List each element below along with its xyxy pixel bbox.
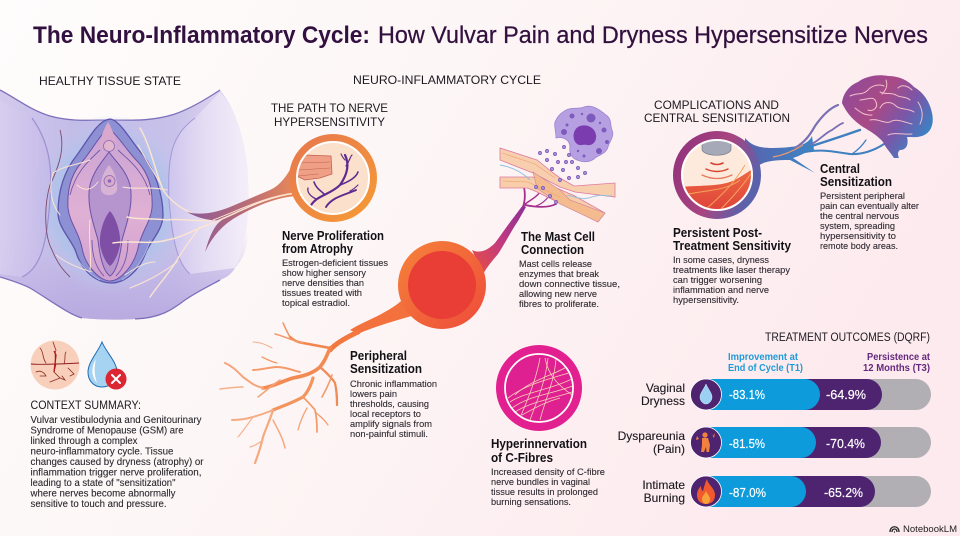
text block: Estrogen-deficient tissues bbox=[282, 258, 388, 269]
text block: Mast cells release bbox=[519, 259, 592, 270]
heading bbox=[491, 437, 587, 465]
text block: inflammation and nerve bbox=[673, 285, 769, 296]
logo: notebooklm: NotebookLM bbox=[903, 524, 957, 534]
icon: inflammation node bbox=[350, 241, 486, 334]
text block: tissues treated with bbox=[282, 288, 362, 299]
text block: topical estradiol. bbox=[282, 298, 350, 309]
panel: context summary bbox=[30, 340, 204, 510]
text block: fibres to proliferate. bbox=[519, 299, 599, 310]
row: dyspareunia: (Pain) bbox=[653, 442, 685, 456]
title: How Vulvar Pain and Dryness Hypersensitize Nerves bbox=[378, 22, 928, 49]
illustration: healthy tissue anatomy bbox=[0, 90, 248, 320]
icon: mast cell bbox=[535, 106, 613, 203]
heading: the path to nerve hypersensitivity bbox=[271, 101, 388, 129]
legend: persistence: Persistence at bbox=[867, 352, 931, 363]
panel: peripheral sensitization bbox=[350, 349, 437, 440]
icon: laser treatment on tissue bbox=[673, 131, 761, 219]
text block bbox=[491, 467, 605, 508]
text block: tissue results in prolonged bbox=[491, 487, 598, 498]
heading: The Mast Cell bbox=[521, 230, 595, 244]
heading: Sensitization bbox=[350, 362, 422, 376]
row: intimate burning: -87.0% bbox=[729, 485, 766, 500]
text block: Chronic inflammation bbox=[350, 379, 437, 390]
legend: improvement: Improvement at bbox=[728, 352, 799, 363]
text block: linked through a complex bbox=[30, 436, 138, 447]
text block: hypersensitivity to bbox=[820, 231, 896, 242]
panel: nerve proliferation from atrophy bbox=[282, 134, 388, 309]
icon: water drop with cross bbox=[88, 342, 126, 390]
icon: c-fibre bundle bbox=[496, 345, 582, 431]
row: intimate burning: Burning bbox=[644, 491, 685, 505]
heading: the path to nerve hypersensitivity: HYPERSENSITIVITY bbox=[274, 115, 385, 129]
heading bbox=[673, 226, 791, 253]
title: The Neuro-Inflammatory Cycle: bbox=[33, 22, 370, 49]
panel: hyperinnervation of c-fibres bbox=[491, 345, 605, 508]
text block: leading to a state of "sensitization" bbox=[30, 478, 176, 489]
heading: complications and central sensitization: CENTRAL SENSITIZATION bbox=[644, 111, 790, 125]
text block: non-painful stimuli. bbox=[350, 429, 428, 440]
nerve: inflammation node to mast cell tissue bbox=[472, 183, 556, 274]
text block: pain can eventually alter bbox=[820, 201, 919, 212]
row: intimate burning: -65.2% bbox=[824, 485, 863, 500]
text block: inflammation trigger nerve proliferation, bbox=[30, 468, 202, 478]
text block: down connective tissue, bbox=[519, 279, 620, 290]
text block: Syndrome of Menopause (GSM) are bbox=[30, 426, 184, 436]
heading: Sensitization bbox=[820, 175, 892, 189]
row: dyspareunia: -81.5% bbox=[729, 436, 765, 451]
heading: neuro-inflammatory cycle: NEURO-INFLAMMATORY CYCLE bbox=[353, 73, 541, 87]
icon: cracked dry skin bbox=[30, 340, 80, 390]
legend: persistence: 12 Months (T3) bbox=[863, 363, 930, 374]
text block: neuro-inflammatory cycle. Tissue bbox=[30, 446, 174, 458]
text block: Persistent peripheral bbox=[820, 191, 905, 202]
text block: Increased density of C-fibre bbox=[491, 467, 605, 478]
row: intimate burning: Intimate bbox=[642, 478, 685, 492]
legend: persistence bbox=[863, 352, 931, 374]
text block: enzymes that break bbox=[519, 269, 599, 280]
text block bbox=[673, 255, 790, 306]
text block: amplify signals from bbox=[350, 419, 432, 430]
text block: In some cases, dryness bbox=[673, 255, 769, 266]
title bbox=[33, 22, 928, 49]
text block: allowing new nerve bbox=[519, 289, 597, 300]
panel: central sensitization bbox=[820, 162, 919, 252]
text block: Vulvar vestibulodynia and Genitourinary bbox=[30, 415, 202, 426]
panel: the mast cell connection bbox=[500, 106, 620, 310]
heading: Persistent Post- bbox=[673, 226, 762, 240]
heading: complications and central sensitization: COMPLICATIONS AND bbox=[654, 98, 779, 112]
text block: can trigger worsening bbox=[673, 275, 762, 286]
heading bbox=[282, 229, 384, 256]
panel: persistent post-treatment sensitivity bbox=[673, 131, 791, 306]
heading bbox=[350, 349, 422, 376]
text block bbox=[820, 191, 919, 252]
row: vaginal dryness: Vaginal bbox=[646, 381, 685, 395]
row: vaginal dryness: Dryness bbox=[641, 394, 685, 408]
text block: system, spreading bbox=[820, 221, 895, 232]
heading: healthy tissue state: HEALTHY TISSUE STATE bbox=[39, 74, 181, 88]
text block: local receptors to bbox=[350, 409, 421, 420]
nerve trunk: laser circle to brain bbox=[745, 105, 884, 198]
legend: improvement: End of Cycle (T1) bbox=[728, 363, 803, 374]
text block: treatments like laser therapy bbox=[673, 265, 790, 276]
text block: the central nervous bbox=[820, 211, 899, 222]
text block bbox=[519, 259, 620, 310]
text block: changes caused by dryness (atrophy) or bbox=[30, 457, 204, 468]
row: vaginal dryness bbox=[641, 379, 931, 410]
chart title: TREATMENT OUTCOMES (DQRF) bbox=[765, 332, 930, 344]
text block bbox=[350, 379, 437, 440]
heading: from Atrophy bbox=[282, 242, 353, 256]
heading: CONTEXT SUMMARY: bbox=[30, 400, 141, 412]
text block: lowers pain bbox=[350, 389, 397, 400]
row: vaginal dryness: -83.1% bbox=[729, 387, 765, 402]
nerve trunk: healthy tissue to proliferation circle bbox=[187, 160, 298, 252]
chart: treatment outcomes bbox=[618, 332, 931, 507]
row: intimate burning bbox=[642, 476, 931, 507]
text block: nerve bundles in vaginal bbox=[491, 477, 590, 488]
heading: Hyperinnervation bbox=[491, 437, 587, 451]
legend: improvement bbox=[728, 352, 803, 374]
text block bbox=[282, 258, 388, 309]
text block: thresholds, causing bbox=[350, 399, 429, 410]
icon: atrophied tissue and nerve branches bbox=[289, 134, 377, 222]
illustration: peripheral nerve tree bbox=[220, 323, 358, 463]
text block: remote body areas. bbox=[820, 241, 898, 252]
text block: where nerves become abnormally bbox=[30, 488, 176, 500]
text block: sensitive to touch and pressure. bbox=[30, 499, 166, 510]
text block bbox=[30, 415, 204, 510]
text block: hypersensitivity. bbox=[673, 295, 739, 306]
heading bbox=[820, 162, 892, 189]
row: dyspareunia: Dyspareunia bbox=[618, 429, 685, 443]
row: vaginal dryness: -64.9% bbox=[826, 387, 866, 402]
heading: of C-Fibres bbox=[491, 451, 553, 465]
heading: the path to nerve hypersensitivity: THE PATH TO NERVE bbox=[271, 101, 388, 115]
heading bbox=[521, 230, 595, 257]
icon: brain bbox=[842, 75, 933, 158]
row: dyspareunia: -70.4% bbox=[826, 436, 865, 451]
icon: connective tissue strips bbox=[500, 148, 615, 222]
heading: Treatment Sensitivity bbox=[673, 239, 791, 253]
heading: Connection bbox=[521, 243, 584, 257]
row: dyspareunia bbox=[618, 427, 931, 458]
heading: Peripheral bbox=[350, 349, 407, 363]
text block: show higher sensory bbox=[282, 268, 366, 279]
text block: burning sensations. bbox=[491, 497, 571, 508]
text block: nerve densities than bbox=[282, 278, 364, 289]
heading: Central bbox=[820, 162, 860, 176]
heading: Nerve Proliferation bbox=[282, 229, 384, 243]
heading: complications and central sensitization bbox=[644, 98, 790, 125]
